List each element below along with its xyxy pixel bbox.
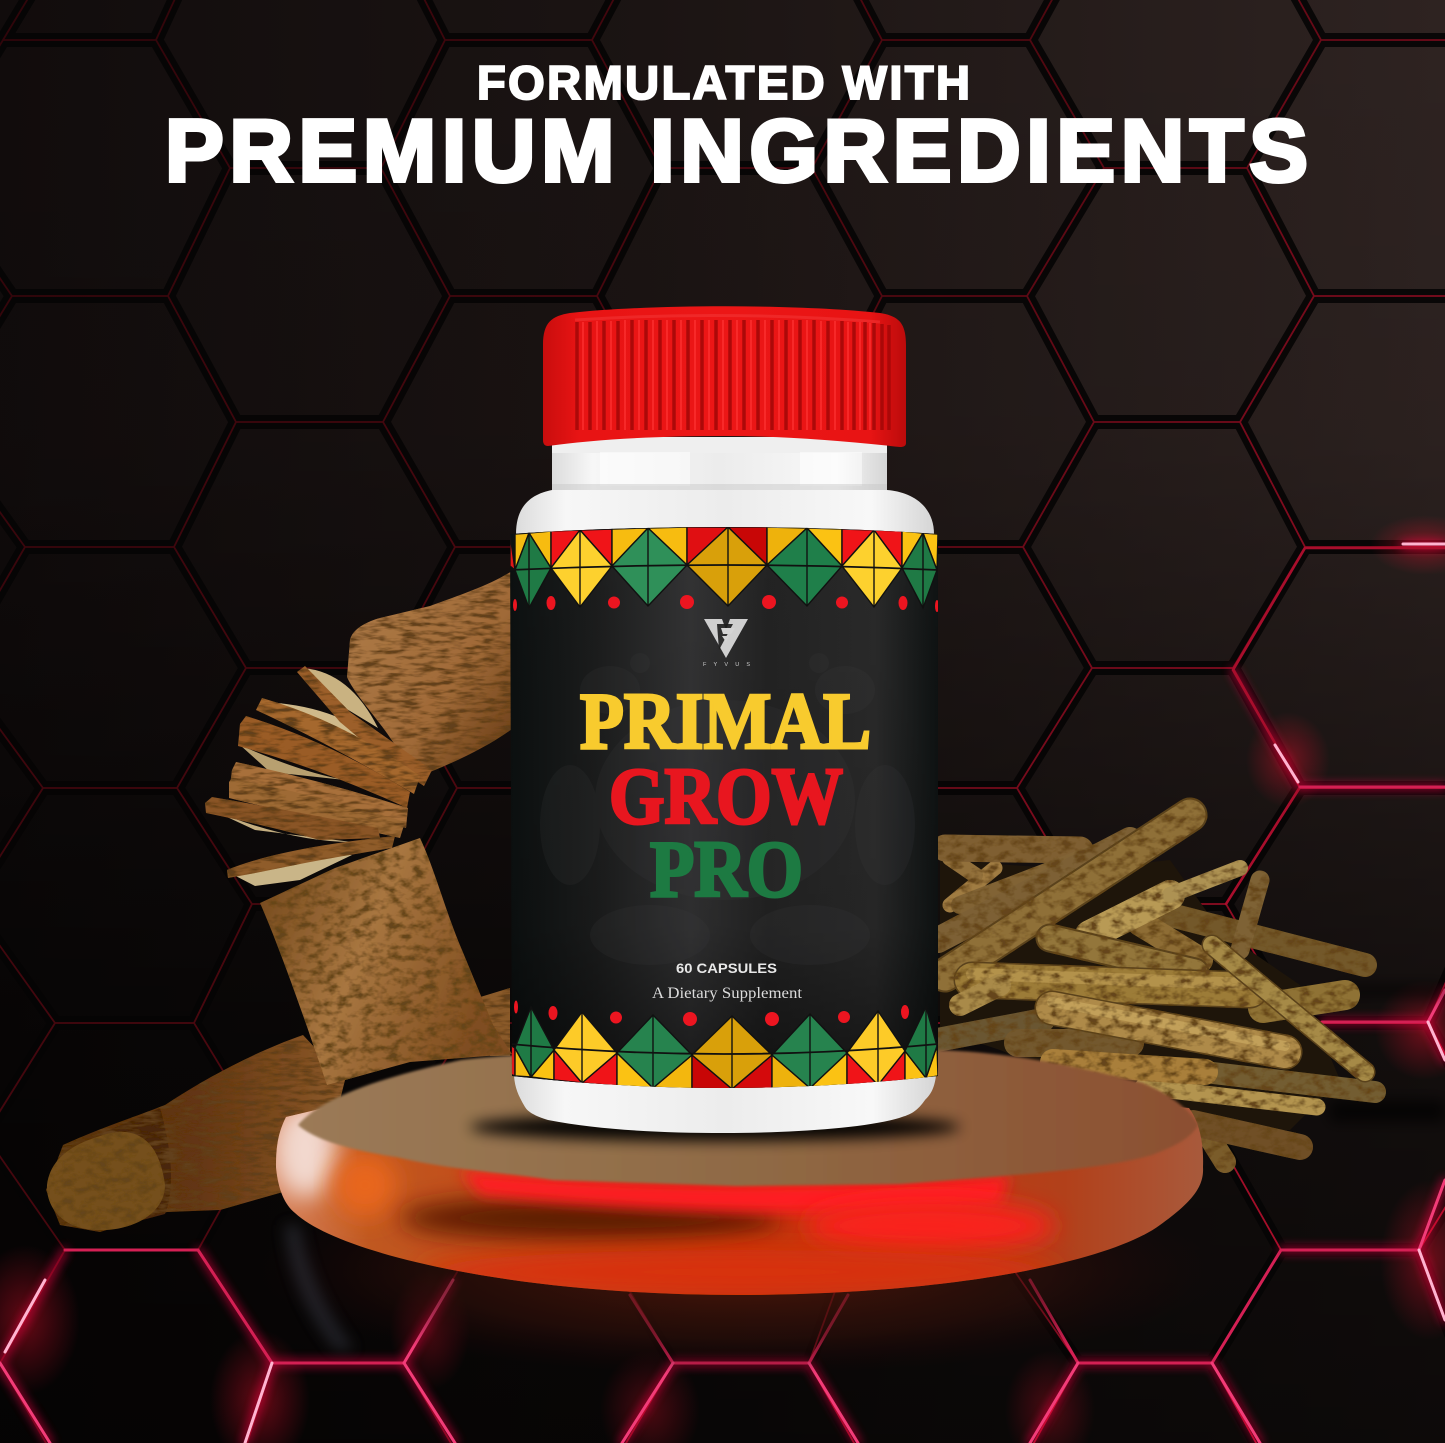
bottle base [514, 1076, 936, 1133]
capsule count: 60 CAPSULES [676, 961, 777, 976]
dietary supplement line: A Dietary Supplement [652, 985, 803, 1002]
pile shadow mass [940, 860, 1340, 1130]
pedestal side [276, 1090, 1203, 1295]
bottle shadow [470, 1113, 960, 1141]
root sticks [937, 815, 1375, 1162]
cassava stump [260, 838, 512, 1085]
glowing neon hexagon edges [0, 515, 1445, 1443]
cassava slices [205, 666, 432, 886]
product name: PRIMAL [580, 678, 871, 766]
top tribal pattern [510, 527, 938, 608]
root end cap [47, 1132, 165, 1230]
reflection of pedestal on floor [260, 1165, 1220, 1375]
product name: GROW [609, 753, 843, 841]
top red dots [513, 595, 939, 612]
brand logo [703, 619, 750, 668]
bottom red dots [514, 1000, 909, 1026]
bottle label [510, 520, 940, 1100]
ingredient: cassava root with slices [46, 571, 512, 1232]
product bottle [510, 306, 940, 1133]
bottom tribal pattern [510, 1007, 938, 1089]
red screw cap [543, 306, 906, 447]
bottle neck [552, 437, 887, 497]
title line one: FORMULATED WITH [477, 56, 970, 109]
lower cassava root [46, 988, 510, 1232]
dark shadows beside pile [1330, 985, 1445, 1122]
brand logo: FYVUS [703, 662, 750, 668]
pedestal platform [273, 1047, 1203, 1295]
title [165, 56, 1308, 200]
title line two: PREMIUM INGREDIENTS [165, 101, 1308, 200]
ingredient: ashwagandha root pile [937, 815, 1445, 1162]
product name: PRO [650, 826, 803, 914]
pedestal top surface [298, 1047, 1198, 1186]
bottle shoulder [516, 490, 934, 534]
upper cassava root [347, 571, 512, 772]
label faint tribal motif [540, 653, 915, 965]
product name [580, 678, 871, 914]
